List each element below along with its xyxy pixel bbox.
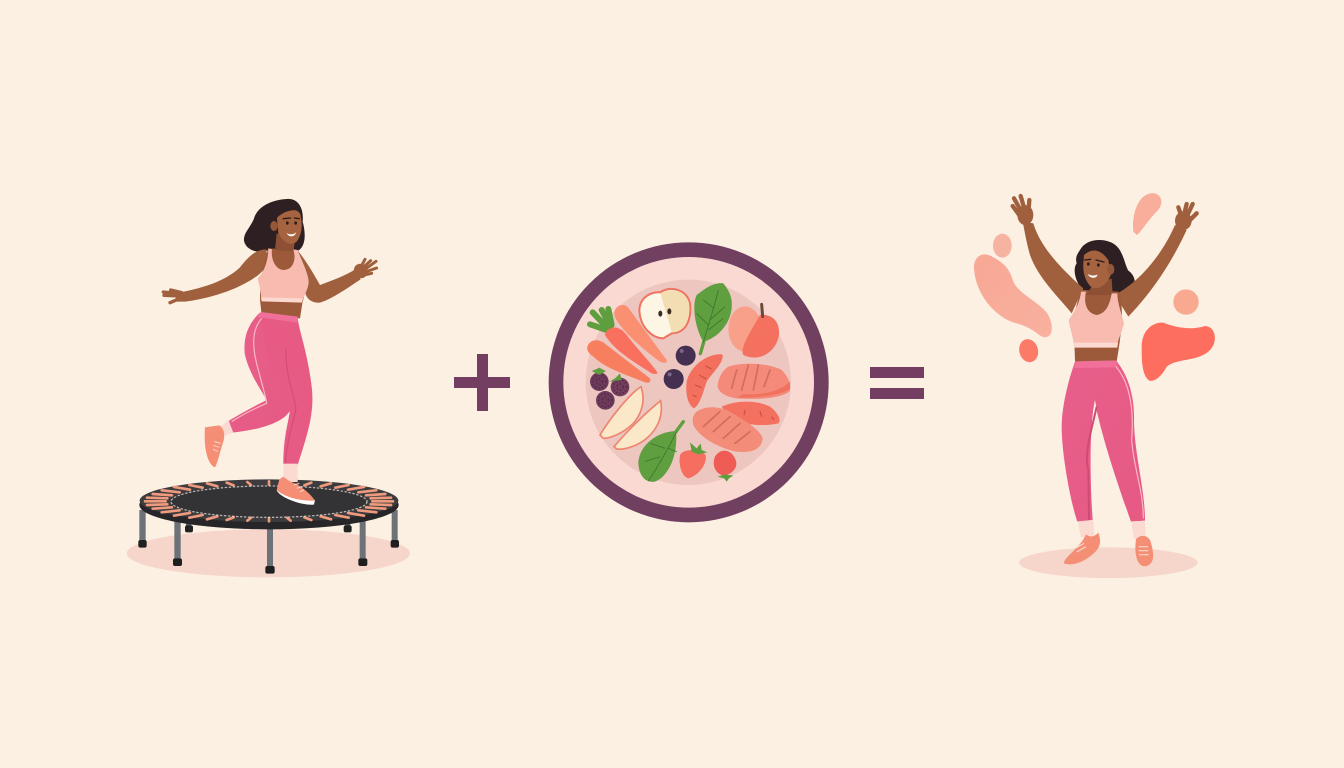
- sock bent: [219, 420, 233, 436]
- torso: [1074, 290, 1122, 362]
- carrot upper: [614, 305, 667, 363]
- bent leg legging: [229, 313, 297, 433]
- sweet potato slice: [686, 354, 723, 408]
- blueberries: [664, 346, 696, 389]
- figure: woman jumping on trampoline: [127, 199, 410, 577]
- spinach leaf lower: [638, 422, 683, 482]
- plate surface: [563, 257, 814, 508]
- springs: [145, 481, 393, 521]
- white stitching ring: [171, 486, 367, 517]
- figure: happy woman with energy blobs: [974, 193, 1215, 578]
- chicken right: [718, 364, 790, 399]
- right hand fingers: [361, 259, 377, 275]
- spinach leaf top: [694, 283, 732, 354]
- sports top: [258, 248, 309, 302]
- ear: [1107, 264, 1114, 275]
- trampoline: [138, 479, 399, 574]
- face: [277, 209, 302, 244]
- right arm: [1115, 225, 1187, 317]
- apple slices: [600, 387, 661, 449]
- right arm: [297, 250, 361, 303]
- plus sign: [454, 354, 510, 411]
- equals sign: [870, 367, 924, 399]
- sweet potato lower: [722, 402, 780, 425]
- sock standing: [283, 464, 298, 482]
- plate well: [586, 280, 791, 485]
- ground shadow: [127, 529, 410, 577]
- right palm: [1175, 211, 1192, 230]
- ear: [270, 221, 278, 231]
- red apple: [728, 304, 779, 358]
- legging stripes: [232, 318, 267, 422]
- shoe right: [1135, 536, 1153, 566]
- strawberry right: [714, 451, 736, 482]
- back legs: [185, 520, 352, 532]
- jumping mat: [172, 487, 366, 517]
- plate rim: [549, 242, 829, 522]
- carrot greens: [590, 309, 612, 330]
- left hand fingers: [163, 290, 182, 303]
- hair back: [244, 199, 305, 252]
- top band: [261, 297, 302, 303]
- legging stripe: [1116, 367, 1143, 518]
- apple half: [639, 289, 690, 338]
- waistband: [257, 312, 298, 323]
- left palm: [1017, 205, 1033, 225]
- strawberry left: [680, 442, 707, 478]
- face: [1083, 250, 1111, 288]
- legging fold: [285, 348, 296, 463]
- chicken lower: [693, 407, 763, 452]
- right hand palm: [351, 261, 370, 281]
- energy blobs: [974, 193, 1215, 381]
- left arm: [1023, 222, 1083, 313]
- hair back: [1075, 240, 1135, 293]
- neck: [1086, 278, 1113, 295]
- standing leg legging: [260, 313, 312, 465]
- shoe left: [1064, 533, 1100, 564]
- left hand fingers: [1013, 196, 1029, 218]
- face details: [1085, 259, 1104, 278]
- leggings: [1062, 361, 1145, 522]
- leg feet: [138, 540, 399, 574]
- ground shadow: [1019, 547, 1198, 578]
- food plate: [549, 242, 829, 522]
- face details: [283, 218, 299, 236]
- hair fringe: [274, 205, 300, 220]
- torso: [260, 248, 306, 318]
- carrot main: [605, 327, 657, 374]
- socks: [1078, 520, 1146, 539]
- blackberries: [590, 368, 629, 410]
- front legs: [139, 510, 398, 567]
- frame top: [140, 479, 398, 522]
- left arm: [175, 249, 268, 302]
- waistband: [1074, 360, 1118, 368]
- shoe standing: [277, 477, 315, 505]
- right hand fingers: [1178, 204, 1197, 222]
- carrot lower: [587, 340, 650, 383]
- top band: [1074, 343, 1118, 348]
- shoe bent: [205, 425, 224, 467]
- neck: [275, 233, 295, 252]
- sports top: [1069, 292, 1124, 347]
- legging fold: [1087, 407, 1097, 520]
- frame side: [139, 481, 399, 529]
